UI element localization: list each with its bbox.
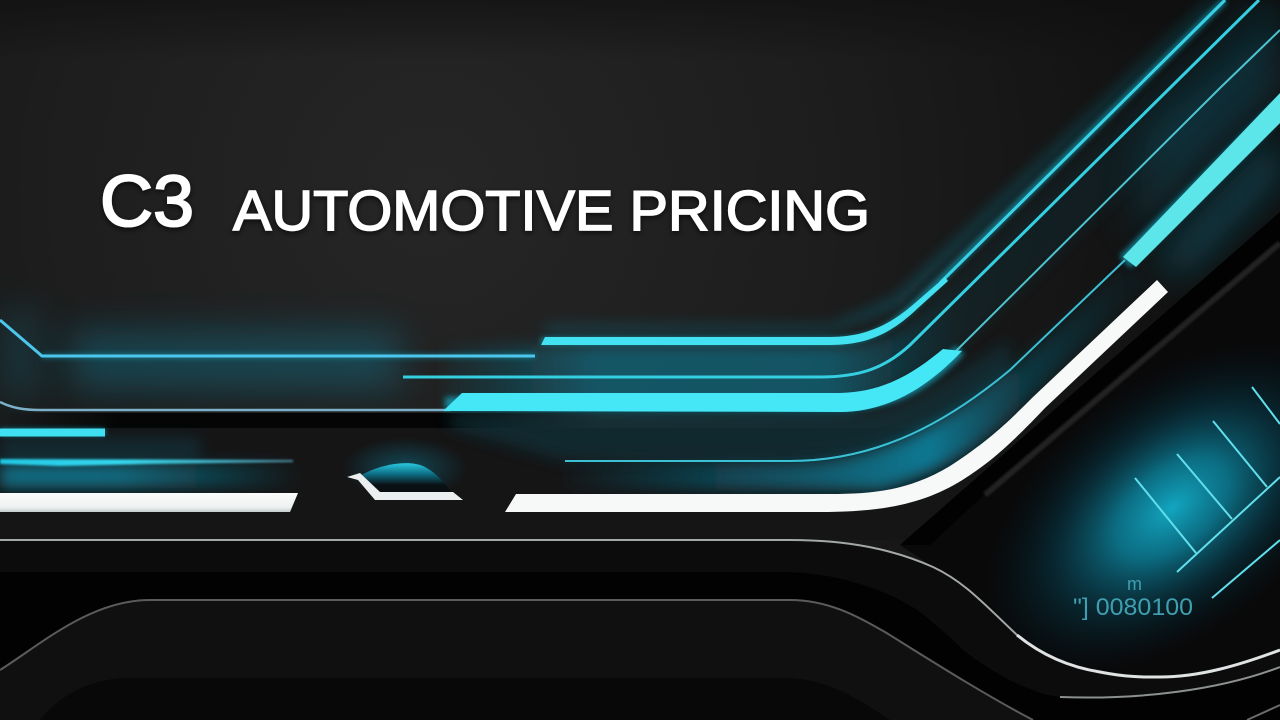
title: AUTOMOTIVE PRICING xyxy=(233,179,870,243)
second streak xyxy=(403,0,1259,377)
left tapered streak xyxy=(0,459,293,466)
far lower curve xyxy=(1060,667,1280,698)
second lower curve xyxy=(0,600,1033,720)
white road stripe left xyxy=(0,493,298,512)
icon: central car silhouette xyxy=(343,438,467,500)
gauge tick lines xyxy=(1135,387,1280,598)
white road stripe right xyxy=(505,280,1168,512)
gauge readout: "] 0080100 xyxy=(1073,594,1193,621)
cyan light streaks xyxy=(0,0,1280,461)
lower bright highlight xyxy=(1017,635,1280,677)
thin top section of first streak xyxy=(940,0,1225,283)
thick cyan bar right xyxy=(1123,93,1280,267)
upper left thin line xyxy=(0,320,535,356)
panel: right dashboard xyxy=(900,212,1280,655)
corner lower curve xyxy=(1247,705,1280,720)
title: C3 xyxy=(100,162,194,242)
title xyxy=(100,162,870,243)
gauge readout: m xyxy=(1127,574,1142,594)
thick cyan wedge xyxy=(443,349,962,412)
fourth streak xyxy=(565,260,1125,461)
short left dash xyxy=(0,428,105,436)
black gap strip xyxy=(0,413,600,428)
teal bands xyxy=(0,266,1150,490)
thick upper streak xyxy=(541,277,948,345)
gauge readout xyxy=(1073,574,1193,621)
third long line xyxy=(0,402,450,410)
streak glow xyxy=(0,0,1280,432)
lower grey curve xyxy=(0,540,1017,635)
lower dark bands xyxy=(0,540,1280,720)
glow behind light streaks xyxy=(0,0,1280,412)
